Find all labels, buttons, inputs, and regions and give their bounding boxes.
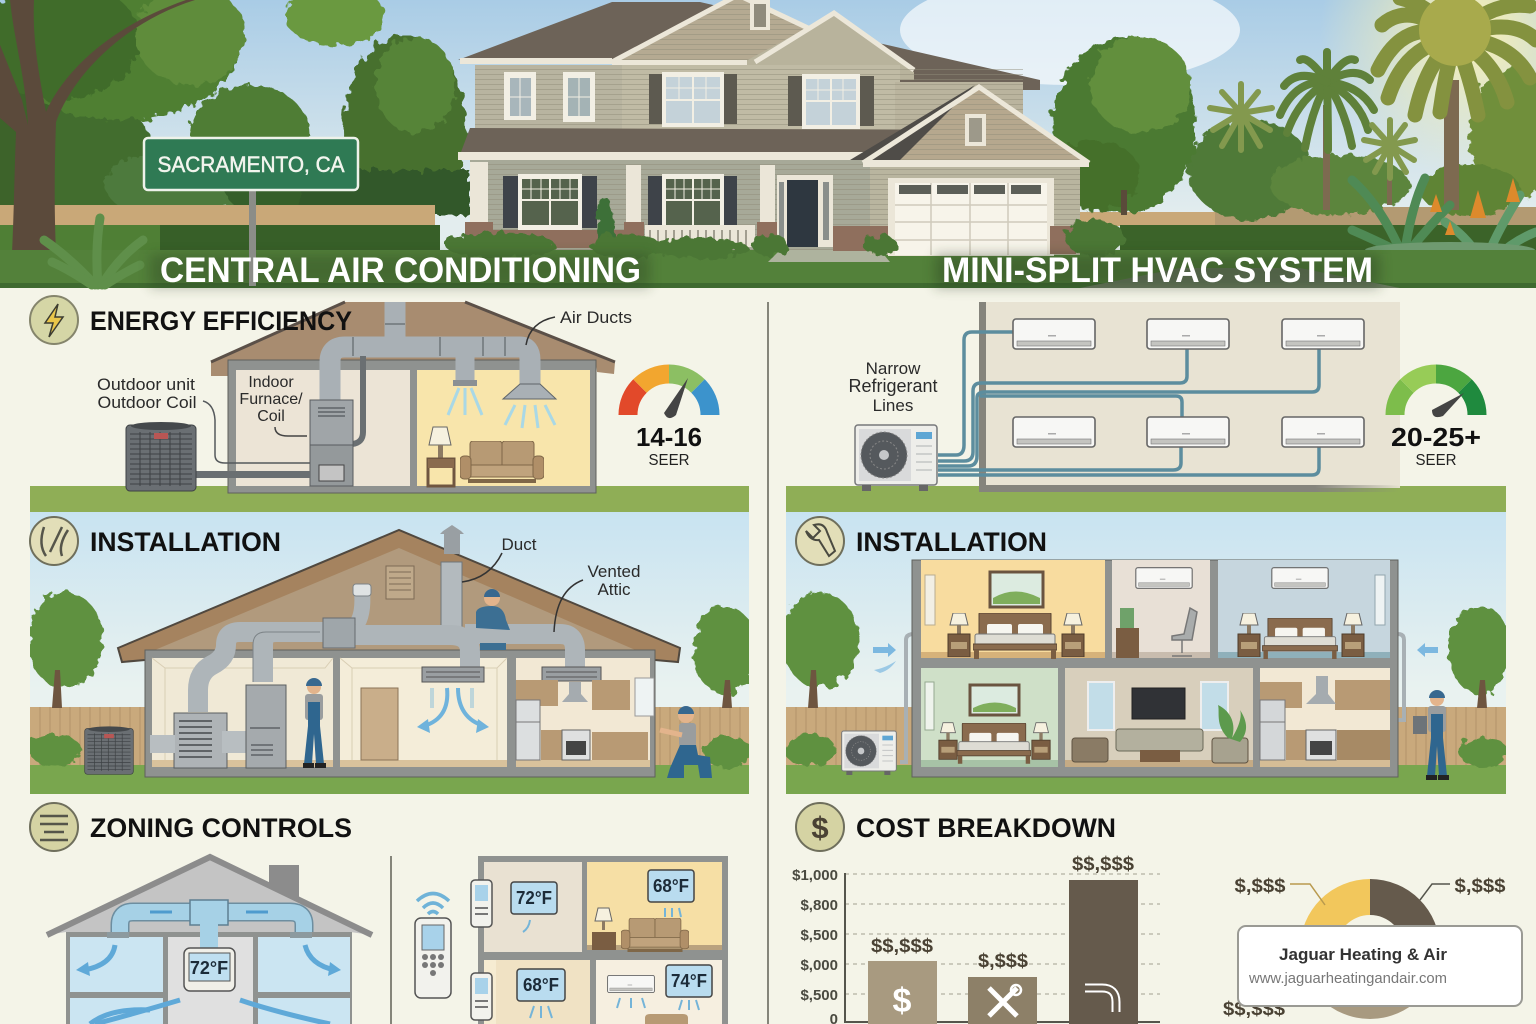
AC cabinet and furnace (174, 713, 227, 768)
outdoor condenser (842, 731, 896, 775)
refrigerant lines (938, 332, 1319, 475)
gauge: 20-25+ SEER: 20-25+ (1391, 422, 1481, 452)
gauge: 14-16 SEER: SEER (648, 452, 690, 469)
donut chart (1223, 876, 1506, 1020)
zone divider (390, 856, 392, 1024)
airflow (84, 945, 335, 1024)
label: narrow refrigerant lines: Narrow (866, 359, 921, 378)
column divider (767, 302, 769, 1024)
kitchen (516, 678, 654, 760)
icon: zones (30, 803, 78, 851)
thermostat: 68F top (648, 870, 694, 902)
thermostat: 74F (666, 965, 712, 997)
panel: mini-split installation (782, 512, 1512, 794)
door (361, 688, 398, 760)
trees and bushes (782, 592, 1512, 768)
label: vented attic: Vented (588, 562, 640, 581)
label: narrow refrigerant lines: Lines (873, 396, 913, 415)
fence (30, 707, 749, 765)
donut chart: $,$$$ (1454, 876, 1506, 897)
panel: central installation (27, 512, 757, 794)
grass (0, 250, 1536, 288)
bottom-left plant (44, 218, 143, 285)
icon: dollar (796, 803, 844, 851)
big oak trunk (0, 0, 195, 288)
wall controllers (471, 880, 492, 1020)
wall (979, 302, 1400, 492)
brand card: Jaguar Heating & Air (1279, 945, 1447, 964)
label: indoor furnace coil: Furnace/ (239, 391, 303, 408)
sky (30, 512, 749, 765)
tropical plants (1352, 178, 1536, 258)
trees and bushes (27, 592, 757, 768)
thermostat: 68F top: 68°F (653, 876, 689, 896)
sign: Sacramento, CA (144, 138, 358, 286)
ducted zoned house: 72°F (190, 958, 228, 978)
panel: cost breakdown (792, 803, 1506, 1024)
banner shade (150, 254, 650, 288)
grass (786, 765, 1506, 794)
lamp and table (428, 427, 454, 486)
donut chart: $,$$$ (1234, 876, 1286, 897)
gauge: 20-25+ SEER: SEER (1416, 452, 1456, 469)
gauge: 14-16 SEER (628, 374, 710, 469)
lower walls (470, 160, 875, 250)
chimney duct (441, 562, 462, 632)
panel: central energy efficiency (30, 296, 749, 512)
bar chart: $,000 (800, 957, 838, 974)
title: Central Air Conditioning: CENTRAL AIR CONDITIONING (160, 251, 641, 290)
thermostat: 68F bottom (517, 969, 565, 1001)
thermostat: 72F (511, 882, 557, 914)
fence (786, 707, 1506, 765)
upper windows (504, 72, 874, 129)
icon: dollar: $ (811, 810, 829, 845)
left trees (0, 0, 470, 235)
label: narrow refrigerant lines: Refrigerant (848, 376, 938, 396)
title: Mini-Split HVAC System: MINI-SPLIT HVAC SYSTEM (942, 251, 1373, 290)
sign: Sacramento, CA: SACRAMENTO, CA (158, 152, 345, 177)
bar chart: $,$$$ (978, 951, 1028, 972)
shrubs (445, 197, 1125, 258)
technician with tablet (1413, 690, 1449, 780)
supply duct (120, 912, 304, 932)
bar icons: $ (893, 982, 912, 1020)
heading: zoning controls: ZONING CONTROLS (90, 813, 352, 843)
bar chart: $,800 (800, 897, 838, 914)
technician at furnace (303, 678, 326, 768)
icon: wrench (796, 517, 844, 565)
label: vented attic (554, 562, 640, 632)
outdoor unit (126, 422, 196, 491)
airflow (448, 388, 555, 428)
ground strip right (786, 486, 1506, 512)
sky (786, 512, 1506, 765)
furnace (310, 400, 353, 486)
porch columns and railing (465, 162, 778, 250)
heading: installation: INSTALLATION (90, 527, 281, 557)
bar chart: $$,$$$ (1072, 854, 1134, 875)
hero scene: house and landscape (0, 0, 1536, 288)
label: duct (462, 535, 537, 582)
ground strip left (30, 486, 749, 512)
living room (1072, 682, 1248, 763)
bar chart: $$,$$$ (871, 936, 933, 957)
garage door (833, 178, 1076, 256)
bar chart (792, 854, 1160, 1024)
label: duct: Duct (502, 535, 537, 554)
house cross-section (118, 525, 680, 777)
thermostat: 74F: 74°F (671, 971, 707, 991)
kitchen (1260, 676, 1390, 760)
zoned floor plan (478, 856, 728, 1024)
heading: energy efficiency: ENERGY EFFICIENCY (90, 306, 352, 336)
gauge: 14-16 SEER: 14-16 (636, 422, 702, 452)
icon: tools (30, 517, 78, 565)
label: vented attic: Attic (597, 580, 631, 599)
label: indoor furnace coil: Coil (257, 408, 285, 425)
kneeling technician (660, 706, 712, 778)
house upper roof (458, 2, 1040, 90)
brand card (1238, 926, 1522, 1006)
donut chart: $$,$$$ (1223, 999, 1285, 1020)
house walls upper (475, 65, 625, 129)
bar chart: $,500 (800, 927, 838, 944)
thermostat: 72F: 72°F (516, 888, 552, 908)
airflow arrows (873, 643, 1438, 673)
central AC house cross-section (126, 302, 615, 493)
thermostat: 68F bottom: 68°F (523, 975, 559, 995)
technician in attic (476, 589, 510, 650)
garage gable (863, 87, 1089, 163)
label: indoor furnace coil: Indoor (248, 374, 294, 391)
wall units (1013, 319, 1364, 447)
bedroom furniture (939, 568, 1364, 764)
air ducts (330, 302, 530, 400)
remote control (415, 918, 451, 998)
wifi signal (417, 894, 449, 914)
ductwork (198, 590, 575, 712)
palm trees (1444, 80, 1459, 210)
bar chart: $,500 (800, 987, 838, 1004)
panel: mini-split efficiency (786, 302, 1506, 512)
label: outdoor unit: Outdoor unit (97, 375, 195, 394)
porch roof (458, 128, 1000, 160)
fences and hedges (0, 205, 435, 226)
label: outdoor coil: Outdoor Coil (98, 393, 196, 412)
bar chart: $1,000 (792, 867, 838, 884)
outdoor unit (85, 726, 133, 774)
refrigerant lines (196, 471, 310, 478)
sofa (460, 441, 544, 483)
attic vent (386, 566, 414, 599)
blue airflow arrows (424, 688, 484, 726)
building cross-section (912, 560, 1398, 777)
central thermostat (184, 948, 235, 991)
right trees (1050, 37, 1536, 220)
panel: zoning controls (30, 803, 728, 1024)
brand card: www.jaguarheatingandair.com (1248, 971, 1447, 987)
outdoor condenser (855, 425, 937, 491)
air duct leader (526, 317, 555, 345)
grass (30, 765, 749, 794)
label: air ducts: Air Ducts (560, 308, 632, 327)
gauge: 20-25+ SEER (1391, 374, 1481, 469)
heading: installation: INSTALLATION (856, 527, 1047, 557)
ducted zoned house (47, 857, 372, 1024)
outdoor pipes (900, 634, 1404, 762)
icon: lightning (30, 296, 78, 344)
heading: cost breakdown: COST BREAKDOWN (856, 813, 1116, 843)
front door (777, 175, 833, 247)
lower windows (503, 174, 737, 230)
